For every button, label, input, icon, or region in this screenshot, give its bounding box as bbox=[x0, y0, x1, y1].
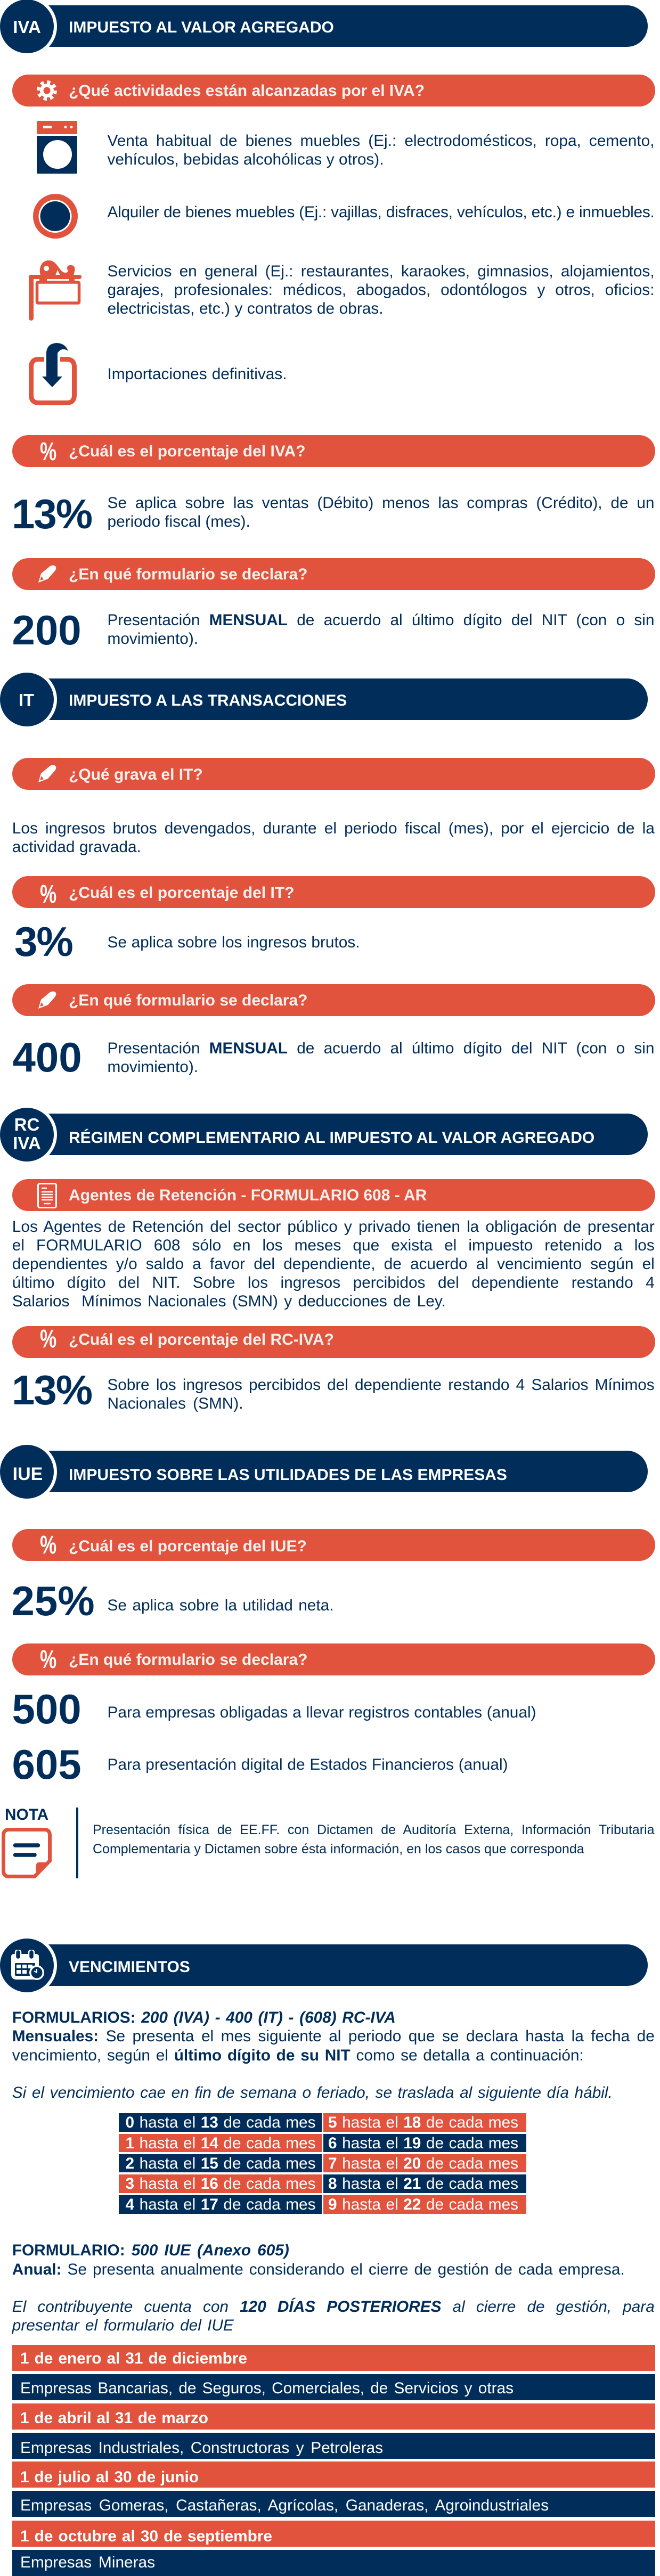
text: se aplica IVA: Se aplica sobre las ventas (Débito) menos las compras (Crédito), de un bbox=[108, 494, 654, 512]
text: ingresos brutos: actividad gravada. bbox=[12, 838, 141, 856]
pill heading: porcentaje RC-IVA: ¿Cuál es el porcentaje del RC-IVA? bbox=[69, 1331, 334, 1348]
panel: vencimientos bbox=[0, 1939, 655, 2576]
text: servicios bbox=[108, 263, 654, 317]
pill heading: formulario IUE bbox=[12, 1643, 655, 1675]
table: cierres de gestión: Empresas Gomeras, Castañeras, Agrícolas, Ganaderas, Agroindustriales bbox=[20, 2497, 549, 2514]
table: cierres de gestión: 1 de julio al 30 de junio bbox=[20, 2468, 199, 2486]
text: presentación 200: movimiento). bbox=[108, 630, 198, 648]
table: vencimientos por dígito NIT: 5 hasta el 18 de cada mes bbox=[328, 2114, 518, 2131]
icon: calendario bbox=[11, 1950, 44, 1980]
text: formulario anual: Anual: Se presenta anualmente considerando el cierre de gestión de cada empresa. bbox=[12, 2261, 625, 2278]
text: nota bbox=[93, 1822, 655, 1857]
text: 120 días: El contribuyente cuenta con 120 DÍAS POSTERIORES al cierre de gestión, para bbox=[12, 2298, 655, 2316]
pill heading: porcentaje IT bbox=[12, 876, 655, 908]
text: agentes de retención: último dígito del NIT. Sobre los ingresos percibidos del dependiente restando 4 bbox=[12, 1274, 655, 1291]
pill heading: porcentaje IVA: ¿Cuál es el porcentaje del IVA? bbox=[69, 443, 306, 460]
table: cierres de gestión: Empresas Mineras bbox=[20, 2554, 155, 2571]
number: 605: 605 bbox=[12, 1741, 82, 1788]
header: IT: IMPUESTO A LAS TRANSACCIONES bbox=[69, 692, 347, 709]
header: RC-IVA: IVA bbox=[13, 1133, 41, 1153]
text: agentes de retención bbox=[12, 1218, 655, 1310]
text: formularios mensuales: FORMULARIOS: 200 (IVA) - 400 (IT) - (608) RC-IVA bbox=[12, 2009, 396, 2026]
text: agentes de retención: el FORMULARIO 608 sólo en los meses que exista el impuesto retenido a los bbox=[12, 1237, 655, 1254]
pill heading: formulario IT: ¿En qué formulario se declara? bbox=[69, 992, 307, 1009]
table: vencimientos por dígito NIT bbox=[119, 2113, 526, 2214]
text: sobre los ingresos bbox=[108, 1376, 654, 1412]
number: 200: 200 bbox=[12, 607, 82, 653]
pill heading: actividades bbox=[12, 75, 655, 107]
header: RC-IVA: RÉGIMEN COMPLEMENTARIO AL IMPUESTO AL VALOR AGREGADO bbox=[69, 1129, 594, 1147]
table: vencimientos por dígito NIT: 9 hasta el 22 de cada mes bbox=[328, 2196, 518, 2213]
pill heading: formulario IUE: ¿En qué formulario se declara? bbox=[69, 1651, 307, 1669]
header: RC-IVA: RC bbox=[14, 1115, 39, 1134]
pill heading: porcentaje IT: ¿Cuál es el porcentaje del IT? bbox=[69, 884, 294, 902]
pill heading: qué grava bbox=[12, 758, 655, 790]
table: vencimientos por dígito NIT: 2 hasta el 15 de cada mes bbox=[126, 2155, 316, 2172]
text: agentes de retención: dependientes y/o saldo a favor del dependiente, de acuerdo al vencimiento según el bbox=[12, 1255, 655, 1273]
text: ingresos brutos bbox=[12, 820, 655, 856]
text: formulario 500: Para empresas obligadas a llevar registros contables (anual) bbox=[108, 1704, 536, 1721]
text: agentes de retención: Los Agentes de Retención del sector público y privado tienen la obligación de presentar bbox=[12, 1218, 655, 1236]
header: vencimientos bbox=[0, 1939, 648, 1992]
text: sobre los ingresos: Nacionales (SMN). bbox=[108, 1395, 243, 1412]
text: formularios mensuales bbox=[12, 2009, 655, 2064]
text: se aplica IT: Se aplica sobre los ingresos brutos. bbox=[108, 934, 360, 951]
text: presentación 400: Presentación MENSUAL de acuerdo al último dígito del NIT (con o sin bbox=[108, 1040, 654, 1057]
text: formulario anual: FORMULARIO: 500 IUE (Anexo 605) bbox=[12, 2242, 289, 2259]
pill heading: qué grava: ¿Qué grava el IT? bbox=[69, 766, 203, 783]
table: vencimientos por dígito NIT: 4 hasta el 17 de cada mes bbox=[126, 2196, 316, 2213]
header: RC-IVA bbox=[0, 1108, 648, 1162]
panel: RC-IVA bbox=[0, 1108, 655, 1413]
text: venta habitual bbox=[108, 132, 654, 168]
pill heading: actividades: ¿Qué actividades están alcanzadas por el IVA? bbox=[69, 82, 425, 100]
text: nota: Presentación física de EE.FF. con Dictamen de Auditoría Externa, Información Tributaria bbox=[93, 1822, 654, 1837]
table: vencimientos por dígito NIT: 0 hasta el 13 de cada mes bbox=[126, 2114, 316, 2131]
text: servicios: Servicios en general (Ej.: restaurantes, karaokes, gimnasios, alojamientos, bbox=[108, 263, 654, 280]
text: presentación 200: Presentación MENSUAL de acuerdo al último dígito del NIT (con o sin bbox=[108, 611, 654, 629]
icon: plato bbox=[33, 194, 78, 239]
divider: nota bbox=[76, 1808, 78, 1878]
number: 3%: 3% bbox=[14, 918, 72, 965]
text: se aplica IVA bbox=[108, 494, 654, 530]
table: vencimientos por dígito NIT: 8 hasta el 21 de cada mes bbox=[328, 2175, 518, 2193]
text: servicios: electricistas, etc.) y contratos de obras. bbox=[108, 300, 384, 317]
text: presentación 400: movimiento). bbox=[108, 1058, 198, 1076]
table: cierres de gestión: Empresas Industriales, Constructoras y Petroleras bbox=[20, 2439, 383, 2457]
icon: importación bbox=[29, 343, 77, 405]
header: vencimientos: VENCIMIENTOS bbox=[69, 1958, 190, 1976]
pill heading: porcentaje IUE: ¿Cuál es el porcentaje del IUE? bbox=[69, 1538, 307, 1555]
pill heading: porcentaje IUE: % bbox=[40, 1531, 56, 1559]
header: IVA bbox=[0, 0, 648, 53]
text: 120 días: presentar el formulario del IUE bbox=[12, 2317, 234, 2334]
pill heading: porcentaje RC-IVA bbox=[12, 1326, 655, 1358]
text: formularios mensuales: Mensuales: Se presenta el mes siguiente al periodo que se declara hasta la fecha de bbox=[12, 2027, 655, 2045]
table: cierres de gestión bbox=[12, 2345, 655, 2576]
table: cierres de gestión: 1 de enero al 31 de diciembre bbox=[20, 2350, 247, 2367]
text: presentación 200 bbox=[108, 611, 654, 648]
text: formularios mensuales: vencimiento, según el último dígito de su NIT como se detalla a continuación: bbox=[12, 2046, 584, 2064]
text: formulario anual bbox=[12, 2242, 625, 2278]
pill heading: formulario IUE: % bbox=[40, 1646, 56, 1674]
pill heading: formulario IVA bbox=[12, 558, 655, 590]
text: servicios: garajes, profesionales: médicos, abogados, odontólogos y otros, oficios: bbox=[108, 281, 654, 299]
text: venta habitual: Venta habitual de bienes muebles (Ej.: electrodomésticos, ropa, cemento, bbox=[108, 132, 654, 150]
text: 120 días bbox=[12, 2297, 655, 2334]
panel: IUE bbox=[0, 1445, 655, 1878]
text: ingresos brutos: Los ingresos brutos devengados, durante el periodo fiscal (mes), por el ejercicio de la bbox=[12, 820, 655, 837]
pill heading: formulario IVA: ¿En qué formulario se declara? bbox=[69, 566, 307, 583]
number: 13% RC-IVA: 13% bbox=[12, 1367, 92, 1413]
pill heading: porcentaje IVA: % bbox=[40, 438, 56, 466]
pill heading: porcentaje IUE bbox=[12, 1529, 655, 1561]
panel: IVA bbox=[0, 0, 655, 653]
number: 25%: 25% bbox=[12, 1577, 95, 1624]
table: vencimientos por dígito NIT: 3 hasta el 16 de cada mes bbox=[126, 2175, 316, 2193]
pill heading: agentes de retención bbox=[12, 1179, 655, 1211]
text: formulario 605: Para presentación digital de Estados Financieros (anual) bbox=[108, 1756, 508, 1773]
header: IVA: IVA bbox=[13, 17, 41, 37]
header: IUE bbox=[0, 1445, 648, 1499]
table: cierres de gestión: 1 de abril al 31 de marzo bbox=[20, 2409, 208, 2427]
icon: nota bbox=[2, 1828, 52, 1878]
text: importaciones: Importaciones definitivas. bbox=[108, 365, 287, 383]
pill heading: formulario IT bbox=[12, 984, 655, 1016]
text: agentes de retención: Salarios Mínimos Nacionales (SMN) y deducciones de Ley. bbox=[12, 1293, 446, 1310]
pill heading: porcentaje RC-IVA: % bbox=[40, 1325, 56, 1353]
number: 13%: 13% bbox=[12, 490, 92, 537]
text: fin de semana: Si el vencimiento cae en fin de semana o feriado, se traslada al siguiente día hábil. bbox=[12, 2084, 613, 2101]
number: 500: 500 bbox=[12, 1686, 82, 1732]
pill heading: porcentaje IVA bbox=[12, 435, 655, 467]
table: cierres de gestión: 1 de octubre al 30 de septiembre bbox=[20, 2528, 272, 2545]
header: IUE: IUE bbox=[13, 1464, 43, 1484]
text: venta habitual: vehículos, bebidas alcohólicas y otros). bbox=[108, 151, 384, 168]
number: 400: 400 bbox=[13, 1034, 82, 1081]
text: nota: Complementaria y Dictamen sobre ésta información, en los casos que corresponda bbox=[93, 1842, 584, 1857]
header: IT bbox=[0, 673, 648, 726]
heading: nota: NOTA bbox=[5, 1806, 48, 1823]
table: cierres de gestión: Empresas Bancarias, de Seguros, Comerciales, de Servicios y otras bbox=[20, 2379, 514, 2397]
text: presentación 400 bbox=[108, 1040, 654, 1076]
table: vencimientos por dígito NIT: 7 hasta el 20 de cada mes bbox=[328, 2155, 518, 2172]
text: alquiler: Alquiler de bienes muebles (Ej.: vajillas, disfraces, vehículos, etc.) e inmuebles. bbox=[108, 203, 654, 221]
text: utilidad neta: Se aplica sobre la utilidad neta. bbox=[108, 1597, 333, 1614]
table: vencimientos por dígito NIT: 1 hasta el 14 de cada mes bbox=[126, 2135, 316, 2152]
header: IUE: IMPUESTO SOBRE LAS UTILIDADES DE LAS EMPRESAS bbox=[69, 1466, 507, 1484]
pill heading: agentes de retención: Agentes de Retención - FORMULARIO 608 - AR bbox=[69, 1187, 427, 1204]
pill heading: porcentaje IT: % bbox=[40, 880, 56, 909]
panel: IT bbox=[0, 673, 655, 1081]
icon: lavadora bbox=[37, 121, 77, 174]
icon: escritorio bbox=[29, 260, 82, 321]
text: sobre los ingresos: Sobre los ingresos percibidos del dependiente restando 4 Salarios Mínimos bbox=[108, 1376, 654, 1394]
header: IVA: IMPUESTO AL VALOR AGREGADO bbox=[69, 19, 334, 36]
header: IT: IT bbox=[19, 690, 34, 710]
table: vencimientos por dígito NIT: 6 hasta el 19 de cada mes bbox=[328, 2135, 518, 2152]
text: se aplica IVA: periodo fiscal (mes). bbox=[108, 513, 250, 530]
